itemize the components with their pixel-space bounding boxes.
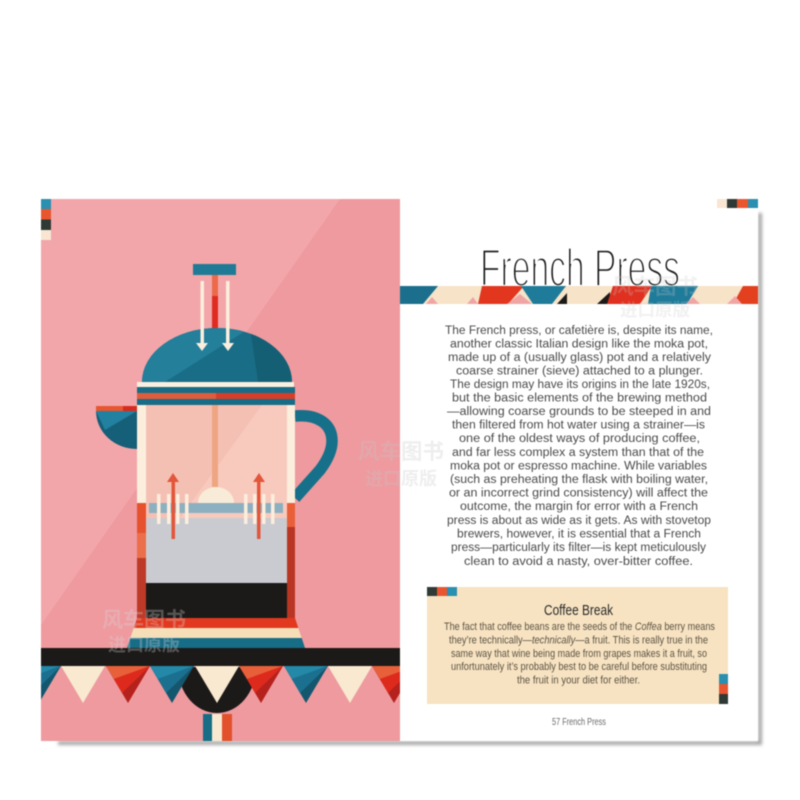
french press <box>96 264 332 648</box>
title bunting strip <box>400 286 758 304</box>
strainer knob <box>198 487 234 503</box>
watermark centre: 风车图书 <box>358 440 444 464</box>
callout text: The fact that coffee beans are the seeds of the Coffea berry means <box>444 621 715 633</box>
body text: The French press, or cafetière is, despite its name, <box>445 325 713 337</box>
watermark lower left: 风车图书 <box>102 609 186 632</box>
strainer plate <box>149 503 283 513</box>
body text: and far less complex a system than that of the <box>452 447 704 459</box>
callout text: the fruit in your diet for either. <box>517 674 640 686</box>
body text: press—particularly its filter—is kept meticulously <box>451 542 706 554</box>
body text: brewers, however, it is essential that a French <box>457 528 701 540</box>
watermark lower left <box>102 609 186 655</box>
colour swatches top left <box>41 199 51 240</box>
handle <box>295 416 332 498</box>
body text: press is about as wide as it gets. As with stovetop <box>447 515 711 527</box>
panel: illustration <box>17 199 416 741</box>
glass <box>146 405 287 518</box>
body text: made up of a (usually glass) pot and a relatively <box>448 352 711 364</box>
body text: another classic Italian design like the moka pot, <box>450 338 708 350</box>
inner rod <box>212 405 218 487</box>
body text: then filtered from hot water using a strainer—is <box>452 420 705 432</box>
callout text: they’re technically—technically—a fruit. This is really true in the <box>449 634 708 646</box>
callout text: same way that wine being made from grapes makes it a fruit, so <box>451 648 707 660</box>
callout text <box>444 621 715 686</box>
spout <box>96 406 137 449</box>
body text: clean to avoid a nasty, over-bitter coffee. <box>464 556 693 568</box>
plunger handle <box>193 264 236 275</box>
body text: moka pot or espresso machine. While variables <box>450 460 707 472</box>
arrows down <box>196 281 234 351</box>
page drop shadow <box>58 213 762 745</box>
body text: —allowing coarse grounds to be steeped in and <box>447 406 711 418</box>
body text: (such as preheating the flask with boiling water, <box>450 474 708 486</box>
glass walls <box>137 405 295 618</box>
callout swatches bottom <box>719 674 728 704</box>
watermark title: 进口原版 <box>620 300 690 320</box>
coffee grounds <box>146 583 287 618</box>
base <box>127 618 305 648</box>
body text: or an incorrect grind consistency) will affect the <box>449 488 708 500</box>
body text: coarse strainer (sieve) attached to a plunger. <box>456 366 703 378</box>
callout text: unfortunately it’s probably best to be careful before substituting <box>451 661 707 673</box>
plunger rod <box>212 275 218 329</box>
watermark title <box>612 275 698 320</box>
callout swatches top <box>427 587 457 596</box>
body text: outcome, the margin for error with a French <box>460 501 698 513</box>
watermark centre <box>358 440 444 489</box>
watermark lower left: 进口原版 <box>108 635 180 655</box>
coffee grey layer <box>146 518 287 583</box>
title: French Press <box>480 239 680 298</box>
dome lid <box>142 328 292 382</box>
callout: coffee break <box>427 587 728 704</box>
bunting <box>17 666 416 703</box>
strainer ticks <box>157 494 274 524</box>
table stand <box>178 667 256 741</box>
watermark centre: 进口原版 <box>365 469 437 489</box>
panel: text page <box>400 199 758 741</box>
arrows up <box>167 473 265 539</box>
page number: 57 French Press <box>552 716 606 728</box>
table top <box>41 648 400 666</box>
body text: but the basic elements of the brewing method <box>452 392 707 404</box>
watermark title: 风车图书 <box>612 275 698 299</box>
callout heading: Coffee Break <box>544 603 614 619</box>
rim and collar <box>137 382 295 405</box>
body text: one of the oldest ways of producing coffee, <box>459 433 700 445</box>
body text <box>445 325 713 568</box>
colour swatches top right <box>717 199 758 208</box>
infographic spread <box>40 198 764 747</box>
body text: The design may have its origins in the late 1920s, <box>450 379 710 391</box>
